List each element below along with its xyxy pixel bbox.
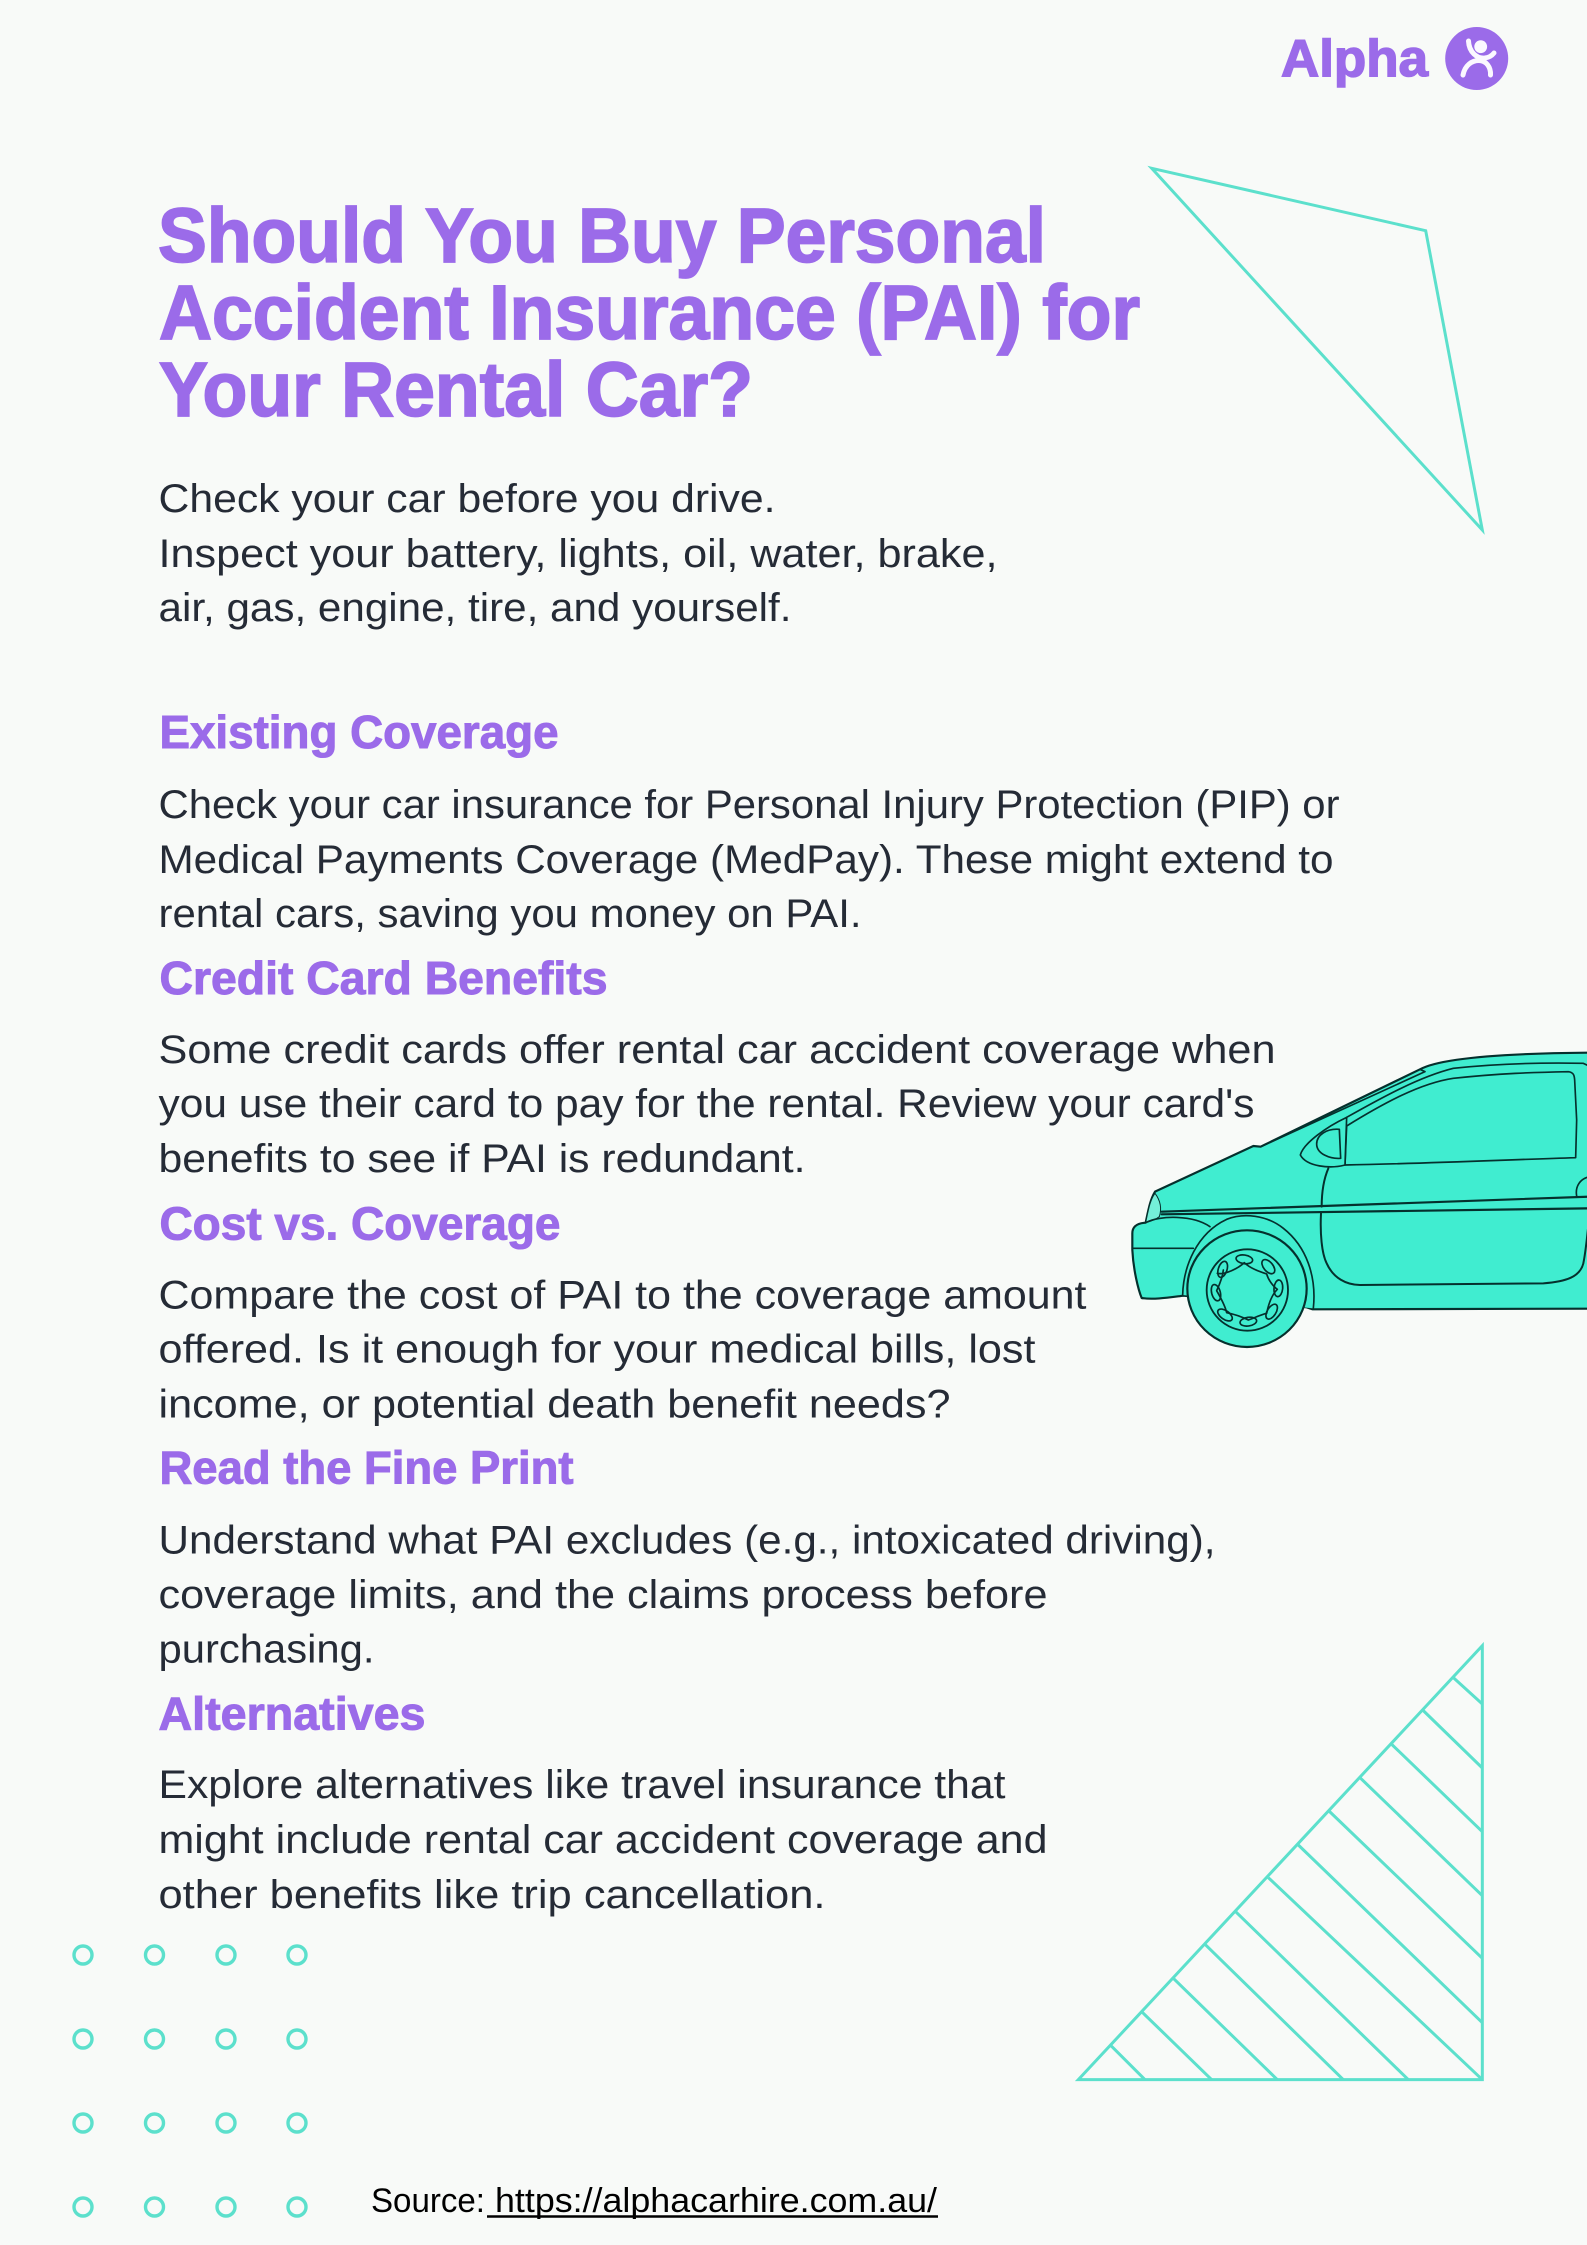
logo: Alpha: Alpha [1281,30,1429,88]
intro text [158,477,998,630]
text: Existing Coverage: rental cars, saving you money on PAI. [158,892,862,936]
text: Cost vs. Coverage: offered. Is it enough for your medical bills, lost [158,1328,1036,1372]
text: Alternatives: Explore alternatives like travel insurance that [158,1763,1006,1807]
text: Credit Card Benefits: you use their card to pay for the rental. Review your card's [158,1082,1254,1126]
intro text: Check your car before you drive. [158,477,776,521]
text: Existing Coverage [158,783,1340,936]
text: Read the Fine Print: Understand what PAI excludes (e.g., intoxicated driving), [158,1518,1216,1562]
title: Your Rental Car? [159,347,753,433]
text: Existing Coverage: Medical Payments Coverage (MedPay). These might extend to [158,838,1334,882]
illustration: teal car side view [1132,1053,1587,1347]
intro text: air, gas, engine, tire, and yourself. [158,586,792,630]
heading: Read the Fine Print: Read the Fine Print [160,1442,574,1494]
text: Read the Fine Print [158,1518,1216,1672]
heading: Existing Coverage: Existing Coverage [160,706,558,758]
text: Credit Card Benefits: Some credit cards offer rental car accident coverage when [158,1028,1276,1072]
decorative triangle outline top right [1152,168,1482,530]
source line: https://alphacarhire.com.au/ [495,2182,938,2220]
decorative dot grid [74,1946,306,2216]
text: Cost vs. Coverage [158,1274,1086,1426]
text: Cost vs. Coverage: Compare the cost of PAI to the coverage amount [158,1274,1086,1318]
text: Cost vs. Coverage: income, or potential death benefit needs? [158,1382,951,1426]
intro text: Inspect your battery, lights, oil, water, brake, [158,532,998,576]
heading: Credit Card Benefits: Credit Card Benefits [160,952,608,1004]
text: Alternatives: other benefits like trip cancellation. [158,1873,826,1917]
title: Should You Buy Personal [158,193,1046,279]
text: Read the Fine Print: purchasing. [158,1628,374,1672]
text: Existing Coverage: Check your car insurance for Personal Injury Protection (PIP) or [158,783,1340,827]
source line: Source: [371,2182,485,2220]
text: Read the Fine Print: coverage limits, and the claims process before [158,1573,1048,1617]
title [158,193,1140,433]
text: Credit Card Benefits: benefits to see if PAI is redundant. [158,1137,806,1181]
decorative hatched triangle [1078,1646,1482,2080]
text: Alternatives: might include rental car accident coverage and [158,1818,1048,1862]
text: Credit Card Benefits [158,1028,1276,1181]
logo: Alpha [1281,27,1508,90]
title: Accident Insurance (PAI) for [159,270,1140,356]
heading: Cost vs. Coverage: Cost vs. Coverage [160,1198,560,1250]
heading: Alternatives: Alternatives [158,1688,426,1740]
text: Alternatives [158,1763,1048,1917]
